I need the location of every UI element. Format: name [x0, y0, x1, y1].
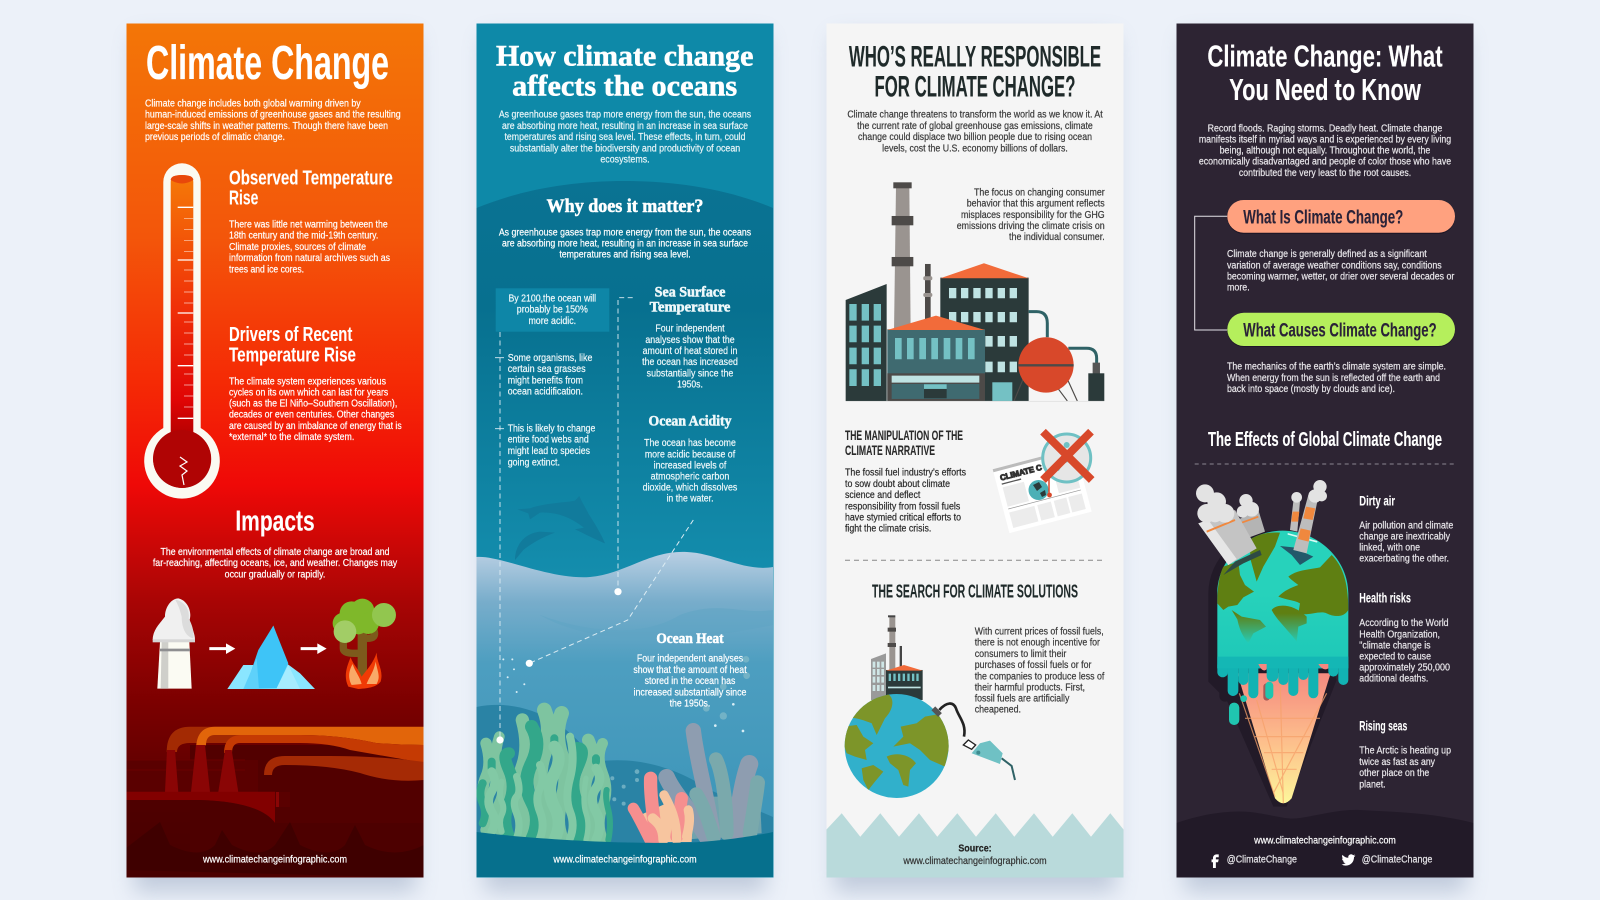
section: ocean acidity: increased levels of [654, 460, 727, 471]
intro text: Climate change threatens to transform the world as we know it. At [847, 110, 1103, 121]
section: search for climate solutions: there is not enough incentive for [975, 638, 1101, 649]
title: How climate change [496, 39, 753, 72]
panel: oceans (teal) [476, 24, 774, 878]
intro text: Climate change includes both global warming driven by [145, 99, 361, 110]
effect: health risks: Health Organization, [1359, 629, 1440, 640]
intro text: levels, cost the U.S. economy billions of dollars. [882, 143, 1068, 154]
title: WHO’S REALLY RESPONSIBLE [849, 41, 1101, 74]
section: ocean heat: Ocean Heat [656, 631, 724, 647]
pill: what causes climate change: What Causes Climate Change? [1243, 321, 1437, 342]
effect: rising seas: The Arctic is heating up [1359, 746, 1451, 757]
text: definition: Climate change is generally defined as a significant [1227, 249, 1427, 260]
section: ocean heat: show that the amount of heat [633, 665, 747, 676]
section: sea surface temperature: 1950s. [677, 379, 703, 390]
title: FOR CLIMATE CHANGE? [874, 71, 1076, 104]
seabed [476, 832, 773, 877]
section: ocean heat: increased substantially since [634, 687, 747, 698]
intro text: contributed the very least to the root causes. [1239, 168, 1411, 179]
effect: rising seas: twice as fast as any [1359, 757, 1435, 768]
section: ocean heat: Four independent analyses [637, 654, 743, 665]
callout: acidity box [496, 288, 609, 332]
section: search for climate solutions: With current prices of fossil fuels, [975, 627, 1104, 638]
section: manipulation of the climate narrative: The fossil fuel industry’s efforts [845, 468, 966, 479]
intro text: As greenhouse gases trap more energy from the sun, the oceans [499, 110, 751, 121]
section: sea surface temperature: substantially since the [647, 368, 734, 379]
icon: newspaper with crossed symbol: CLIMATE C [999, 463, 1043, 483]
footer url: www.climatechangeinfographic.com [552, 855, 697, 866]
intro text: ecosystems. [600, 154, 650, 165]
callout: acidity box: By 2100,the ocean will [508, 294, 596, 305]
text: definition [1227, 249, 1455, 293]
heading: effects: The Effects of Global Climate Change [1208, 429, 1442, 451]
effect: dirty air: linked, with one [1359, 543, 1420, 554]
title [848, 46, 1100, 97]
effect: health risks: expected to cause [1359, 652, 1431, 663]
section: sea surface temperature: amount of heat stored in [643, 346, 737, 357]
left notes: going extinct. [508, 457, 560, 468]
section: impacts: occur gradually or rapidly. [225, 569, 325, 580]
social: twitter: @ClimateChange [1362, 854, 1433, 865]
section: manipulation of the climate narrative: CLIMATE NARRATIVE [845, 442, 935, 458]
section: manipulation of the climate narrative: responsibility from fossil fuels [845, 501, 960, 512]
section: manipulation of the climate narrative: have stymied critical efforts to [845, 512, 961, 523]
section: sea surface temperature: analyses show that the [645, 335, 735, 346]
section: sea surface temperature [642, 285, 738, 390]
intro text: temperatures and rising sea level. These effects, in turn, could [504, 132, 746, 143]
intro text [145, 99, 401, 143]
section: search for climate solutions: their harmful products. First, [975, 682, 1085, 693]
icon: dolphins [515, 496, 605, 560]
left notes: certain sea grasses [508, 364, 586, 375]
title [496, 44, 753, 96]
intro text: Record floods. Raging storms. Deadly heat. Climate change [1208, 123, 1443, 134]
effect: dirty air [1359, 492, 1454, 565]
section: ocean acidity [643, 414, 737, 505]
left notes: Some organisms, like [508, 353, 593, 364]
section: manipulation of the climate narrative: fight the climate crisis. [845, 523, 931, 534]
section: impacts: far-reaching, affecting oceans, ice, and weather. Changes may [153, 558, 397, 569]
effect: health risks: Health risks [1359, 590, 1411, 606]
section: manipulation of the climate narrative: to sow doubt about climate [845, 479, 950, 490]
section: drivers of recent temperature rise: The climate system experiences various [229, 376, 386, 387]
seaweed and corals [480, 656, 762, 842]
consumer behaviour text: The focus on changing consumer [974, 188, 1105, 199]
section: ocean acidity: more acidic because of [645, 449, 735, 460]
section: sea surface temperature: Temperature [650, 300, 731, 316]
text: definition: variation of average weather conditions say, conditions [1227, 260, 1442, 271]
intro text [847, 110, 1103, 154]
section: search for climate solutions: purchases of fossil fuels or for [975, 660, 1092, 671]
effect: dirty air: change are inextricably [1359, 531, 1450, 542]
section: observed temperature rise: trees and ice cores. [229, 264, 304, 275]
consumer behaviour text: misplaces responsibility for the GHG [961, 210, 1105, 221]
section: manipulation of the climate narrative [845, 427, 966, 534]
effect: rising seas: planet. [1359, 779, 1386, 790]
title: affects the oceans [512, 70, 737, 103]
icon: newspaper with crossed symbol [993, 432, 1092, 533]
illustration: factory [846, 182, 1104, 402]
intro text: change could displace two billion people due to rising ocean [858, 132, 1092, 143]
intro text: are absorbing more heat, resulting in an increase in sea surface [502, 121, 748, 132]
left notes: might benefits from [508, 375, 583, 386]
section: search for climate solutions: fossil fuels are artificially [975, 694, 1069, 705]
intro text: manifests itself in myriad ways and is experienced by every living [1199, 134, 1451, 145]
section: observed temperature rise: 18th century and the mid-19th century. [229, 231, 378, 242]
section: search for climate solutions [872, 581, 1105, 716]
effect: health risks: additional deaths. [1359, 674, 1428, 685]
dashed connectors [495, 298, 693, 744]
intro text [1199, 123, 1452, 179]
section: ocean acidity: in the water. [666, 494, 714, 505]
effect: rising seas [1359, 718, 1451, 790]
icon: thermometer [144, 163, 220, 499]
panel: who is responsible (light) [826, 24, 1124, 878]
left notes [508, 353, 596, 468]
section: observed temperature rise: Observed Temperature [229, 166, 393, 189]
section: drivers of recent temperature rise: (such as the El Niño–Southern Oscillation), [229, 399, 397, 410]
section: ocean heat: the 1950s. [670, 698, 710, 709]
ocean scene background [476, 181, 773, 877]
section: ocean acidity: The ocean has become [644, 438, 736, 449]
factory smoke landscape [126, 727, 424, 878]
section: impacts: Impacts [235, 506, 315, 538]
pill: what is climate change: What Is Climate Change? [1243, 207, 1403, 228]
section: ocean acidity: Ocean Acidity [648, 414, 732, 430]
section: drivers of recent temperature rise: Drivers of Recent [229, 323, 352, 346]
illustration: melting earth ice cream [1196, 480, 1348, 807]
intro text: large-scale shifts in weather patterns. Though there have been [145, 121, 388, 132]
illustration: globe with factory and fuel nozzle [843, 615, 1015, 798]
section: drivers of recent temperature rise: are caused by an imbalance of energy that is [229, 421, 402, 432]
section: sea surface temperature: Four independent [655, 324, 725, 335]
section: why does it matter: temperatures and rising sea level. [559, 250, 691, 261]
callout: acidity box: probably be 150% [517, 305, 588, 316]
intro text: substantially alter the biodiversity and productivity of ocean [510, 143, 740, 154]
callout: acidity box: more acidic. [528, 316, 576, 327]
effect: rising seas: Rising seas [1359, 718, 1407, 734]
section: observed temperature rise: There was little net warming between the [229, 220, 388, 231]
section: ocean acidity: atmospheric carbon [651, 472, 729, 483]
section: ocean heat: stored in the ocean has [645, 676, 735, 687]
section: drivers of recent temperature rise: *external* to the climate system. [229, 432, 354, 443]
effect: dirty air: Dirty air [1359, 492, 1395, 508]
consumer behaviour text: emissions driving the climate crisis on [957, 221, 1105, 232]
pill: what causes climate change [1227, 313, 1455, 347]
left notes: might lead to species [508, 446, 590, 457]
consumer behaviour text: the individual consumer. [1009, 232, 1105, 243]
panel: what you need to know (dark) [1176, 24, 1474, 878]
intro text: economically disadvantaged and people of color those who have [1199, 157, 1452, 168]
section: observed temperature rise: Climate proxies, sources of climate [229, 242, 366, 253]
connector bracket [1195, 216, 1227, 330]
text: definition: becoming warmer, wetter, or drier over several decades or [1227, 271, 1455, 282]
section: sea surface temperature: Sea Surface [655, 285, 726, 301]
intro text: human-induced emissions of greenhouse gases and the resulting [145, 110, 401, 121]
section: sea surface temperature: the ocean has increased [642, 357, 738, 368]
section: drivers of recent temperature rise: cycles on its own which can last for years [229, 387, 388, 398]
effect: health risks [1359, 590, 1450, 685]
section: drivers of recent temperature rise: Temperature Rise [229, 343, 356, 366]
effect: health risks: approximately 250,000 [1359, 663, 1450, 674]
section: why does it matter: As greenhouse gases trap more energy from the sun, the oceans [499, 227, 751, 238]
title: You Need to Know [1229, 72, 1421, 107]
left notes: This is likely to change [508, 424, 596, 435]
section: manipulation of the climate narrative: THE MANIPULATION OF THE [845, 427, 963, 443]
text: causes: The mechanics of the earth’s climate system are simple. [1227, 362, 1446, 373]
panel: Climate Change (red) [126, 24, 424, 878]
intro text: the current rate of global greenhouse gas emissions, climate [857, 121, 1093, 132]
intro text: previous periods of climatic change. [145, 132, 285, 143]
title [1208, 44, 1442, 100]
effect: health risks: According to the World [1359, 618, 1449, 629]
left notes: ocean acidification. [508, 386, 583, 397]
effect: rising seas: other place on the [1359, 768, 1430, 779]
social: twitter [1342, 854, 1433, 866]
intro text [499, 110, 751, 165]
consumer behaviour text: behavior that this argument reflects [967, 199, 1105, 210]
effect: health risks: "climate change is [1359, 640, 1431, 651]
section: why does it matter: are absorbing more heat, resulting in an increase in sea surface [502, 239, 748, 250]
section: search for climate solutions: consumers to limit their [975, 649, 1067, 660]
footer url: www.climatechangeinfographic.com [202, 855, 347, 866]
section: search for climate solutions: the companies to produce less of [975, 671, 1105, 682]
section: search for climate solutions: cheapened. [975, 705, 1021, 716]
section: ocean acidity: dioxide, which dissolves [643, 483, 737, 494]
footer zigzag with source: Source: [958, 844, 992, 855]
left notes: entire food webs and [508, 435, 589, 446]
section: manipulation of the climate narrative: science and deflect [845, 490, 920, 501]
consumer behaviour text [957, 188, 1105, 243]
footer zigzag with source: www.climatechangeinfographic.com [902, 856, 1047, 867]
section: observed temperature rise [229, 166, 393, 275]
section: why does it matter [499, 196, 751, 261]
social: facebook: @ClimateChange [1227, 854, 1297, 865]
text: causes [1227, 362, 1446, 395]
section: search for climate solutions: THE SEARCH FOR CLIMATE SOLUTIONS [872, 581, 1078, 601]
effect: dirty air: exacerbating the other. [1359, 554, 1449, 565]
text: causes: back into space (mostly by clouds and ice). [1227, 384, 1395, 395]
intro text: being, although not equally. Throughout the world, the [1220, 146, 1431, 157]
title: Climate Change [146, 37, 389, 90]
footer url: www.climatechangeinfographic.com [1253, 835, 1396, 846]
title: Climate Change: What [1207, 39, 1443, 74]
dashed divider [845, 560, 1102, 561]
social: facebook [1212, 854, 1297, 868]
footer zigzag with source [826, 813, 1124, 878]
footer hill [1176, 810, 1474, 878]
section: why does it matter: Why does it matter? [547, 196, 703, 217]
section: impacts: The environmental effects of climate change are broad and [160, 547, 390, 558]
section: observed temperature rise: information from natural archives such as [229, 253, 390, 264]
icons: chimney, ice and burning tree [153, 598, 396, 689]
section: drivers of recent temperature rise [229, 323, 402, 443]
pill: what is climate change [1227, 200, 1455, 234]
section: ocean heat [633, 631, 747, 709]
text: definition: more. [1227, 282, 1250, 293]
section: drivers of recent temperature rise: decades or even centuries. Other changes [229, 410, 394, 421]
effect: dirty air: Air pollution and climate [1359, 520, 1454, 531]
section: impacts [153, 506, 397, 580]
text: causes: When energy from the sun is reflected off the earth and [1227, 373, 1440, 384]
section: observed temperature rise: Rise [229, 186, 258, 209]
